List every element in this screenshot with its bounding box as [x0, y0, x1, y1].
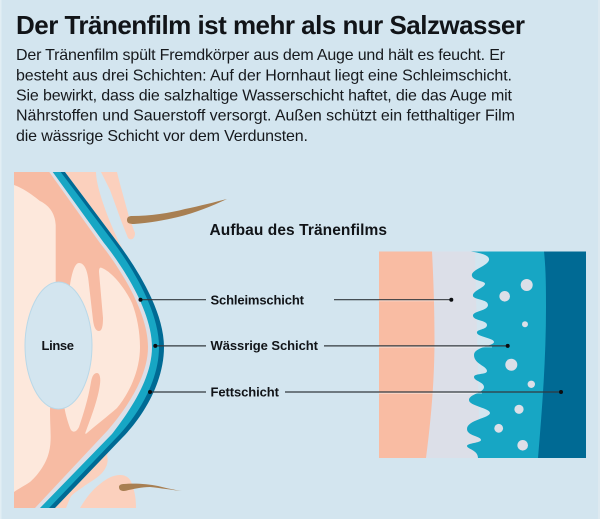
tear film layer diagram — [379, 252, 586, 458]
label: mucus layer — [138, 292, 453, 307]
intro text block: Nährstoffen und Sauerstoff versorgt. Außen schützt ein fetthaltiger Film — [16, 108, 515, 125]
outer light tissue — [14, 185, 56, 492]
fat layer band — [538, 252, 586, 458]
lower eyelid — [50, 445, 136, 508]
lens — [25, 282, 92, 409]
label: watery layer: Wässrige Schicht — [210, 338, 319, 353]
eye cross-section illustration — [14, 172, 227, 508]
cornea: mucus layer — [14, 172, 152, 508]
lower eyelash — [119, 484, 182, 491]
diagram heading: Aufbau des Tränenfilms — [210, 222, 387, 239]
upper eyelid — [60, 172, 135, 252]
eye tissue base — [14, 172, 148, 508]
intro text block: die wässrige Schicht vor dem Verdunsten. — [16, 128, 308, 145]
cornea tissue band — [379, 252, 439, 458]
label: watery layer — [153, 338, 510, 353]
label: mucus layer: Schleimschicht — [210, 292, 305, 307]
lens label: Linse — [42, 338, 74, 353]
inner light tissue — [64, 263, 140, 434]
cornea: fat layer — [14, 172, 164, 508]
label: fat layer — [148, 385, 563, 400]
intro text block: Sie bewirkt, dass die salzhaltige Wasserschicht haftet, die das Auge mit — [16, 88, 513, 105]
label: fat layer: Fettschicht — [210, 385, 280, 400]
mucus layer band — [426, 252, 480, 458]
cornea: watery layer — [14, 172, 159, 508]
intro text block: besteht aus drei Schichten: Auf der Hornhaut liegt eine Schleimschicht. — [16, 67, 512, 84]
upper eyelash — [127, 199, 227, 224]
intro text block — [16, 47, 515, 145]
nutrient bubbles — [494, 279, 535, 451]
watery layer with wavy edge — [467, 252, 552, 458]
title: Der Tränenfilm ist mehr als nur Salzwasser — [16, 10, 525, 40]
intro text block: Der Tränenfilm spült Fremdkörper aus dem Auge und hält es feucht. Er — [16, 47, 506, 64]
